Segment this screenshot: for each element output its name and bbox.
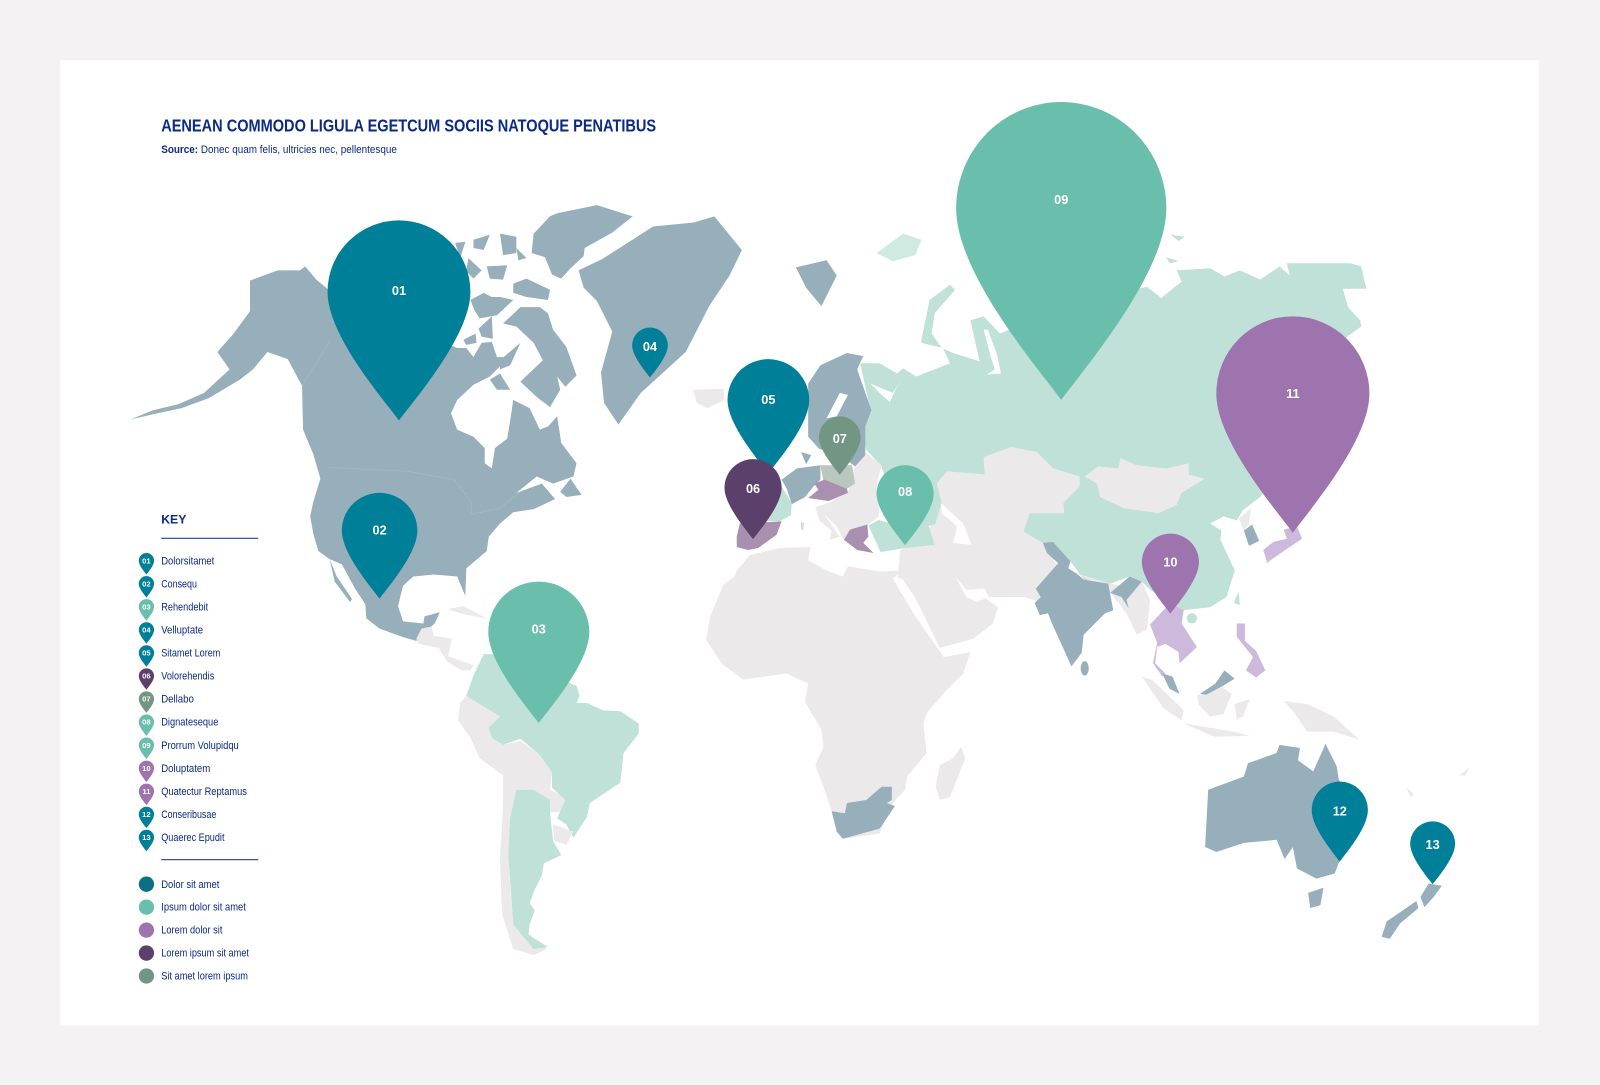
pin 06: 06 <box>746 481 760 496</box>
region: Italy <box>815 507 840 540</box>
region: Central Europe <box>808 480 848 501</box>
pin 05 <box>728 359 809 473</box>
legend item 09: 09 <box>142 741 151 750</box>
legend item 02 <box>139 576 197 598</box>
colour key: lorem ipsum sit amet <box>139 945 249 961</box>
legend item 05: 05 <box>142 649 151 658</box>
pin 02: 02 <box>372 523 387 538</box>
legend item 08: 08 <box>142 718 151 727</box>
region: Central America and South America base <box>416 606 566 955</box>
colour key: ipsum dolor sit amet: Ipsum dolor sit amet <box>161 902 246 914</box>
region: South America green countries <box>466 654 639 949</box>
legend item 10 <box>139 761 210 782</box>
region: Southeast Asia lilac <box>1150 527 1302 678</box>
legend item 01 <box>139 553 214 574</box>
pin 11: 11 <box>1286 386 1300 401</box>
region: Svalbard <box>796 260 837 306</box>
legend item 12: Conseribusae <box>161 809 216 821</box>
legend item 04 <box>139 622 203 644</box>
legend item 10: Doluptatem <box>161 763 210 775</box>
legend item 01: 01 <box>142 556 151 565</box>
legend item 04: 04 <box>142 625 151 634</box>
legend divider bottom <box>161 859 258 860</box>
region: inland seas and gulfs <box>870 330 1001 602</box>
region: Uruguay <box>553 824 573 845</box>
legend item 02: Consequ <box>161 578 197 590</box>
legend item 12: 12 <box>142 810 151 819</box>
legend item 07: Dellabo <box>161 694 194 706</box>
pin 11 <box>1216 316 1369 533</box>
legend item 03: 03 <box>142 602 151 611</box>
legend item 04: Velluptate <box>161 624 203 636</box>
legend <box>139 512 258 984</box>
pin 05: 05 <box>761 392 775 407</box>
legend item 13: Quaerec Epudit <box>161 832 225 844</box>
region: Greece <box>844 524 873 553</box>
legend item 06: 06 <box>142 672 151 681</box>
pin 01 <box>328 220 470 420</box>
legend item 05: Sitamet Lorem <box>161 648 220 660</box>
pin 06 <box>724 459 782 539</box>
pin 02 <box>342 493 417 599</box>
pin 07 <box>819 416 861 475</box>
legend item 08 <box>139 714 218 736</box>
legend item 12 <box>139 807 216 828</box>
region: Caucasus <box>930 521 953 545</box>
legend item 07: 07 <box>142 695 151 704</box>
legend divider top <box>161 538 258 539</box>
pin 10: 10 <box>1163 554 1178 569</box>
legend item 11: Quatectur Reptamus <box>161 786 247 798</box>
region: Eastern Europe and Balkans <box>815 453 882 539</box>
legend item 01: Dolorsitamet <box>161 555 214 567</box>
region: North America <box>131 205 633 641</box>
region: South Africa <box>832 787 895 839</box>
title: AENEAN COMMODO LIGULA EGETCUM SOCIIS NATOQUE PENATIBUS <box>161 116 656 136</box>
colour key: sit amet lorem ipsum: Sit amet lorem ipsum <box>161 971 248 983</box>
region: Madagascar <box>936 747 965 800</box>
colour key: lorem ipsum sit amet: Lorem ipsum sit amet <box>161 948 249 960</box>
pin 10 <box>1142 534 1199 614</box>
region: New Zealand <box>1382 884 1442 939</box>
colour key: lorem dolor sit: Lorem dolor sit <box>161 925 222 937</box>
pin 07: 07 <box>833 431 847 446</box>
legend item 03 <box>139 599 208 621</box>
pin 12: 12 <box>1333 803 1347 818</box>
legend item 09 <box>139 738 239 759</box>
legend item 10: 10 <box>142 764 151 773</box>
region: Australia <box>1205 744 1353 908</box>
legend item 02: 02 <box>142 579 151 588</box>
source line: Source: Donec quam felis, ultricies nec, pellentesque <box>161 144 397 156</box>
world map <box>131 205 1469 955</box>
legend item 06: Volorehendis <box>161 671 214 683</box>
pin 03 <box>488 582 589 723</box>
region: India <box>1035 542 1142 676</box>
region: Spain <box>737 521 782 550</box>
region: Indonesia and Papua <box>1142 508 1469 797</box>
region: Myanmar and Bangladesh <box>1077 573 1150 635</box>
legend item 11: 11 <box>142 787 151 796</box>
pin 08: 08 <box>898 484 912 499</box>
legend item 05 <box>139 645 220 667</box>
pin 01: 01 <box>392 283 406 298</box>
region: Iceland <box>693 389 724 408</box>
legend item 13: 13 <box>142 833 151 842</box>
pin 12 <box>1312 782 1368 862</box>
pin 09 <box>956 102 1166 400</box>
region: Malaysia and Korea <box>1162 524 1259 695</box>
region: Germany <box>782 465 820 504</box>
region: Scandinavia and Baltics <box>808 353 871 466</box>
region: Middle East and Central Asia <box>898 447 1080 648</box>
legend item 11 <box>139 784 247 805</box>
legend item 09: Prorrum Volupidqu <box>161 740 239 752</box>
legend item 07 <box>139 691 194 713</box>
pin 08 <box>877 465 934 545</box>
region: Denmark <box>801 452 811 464</box>
colour key: ipsum dolor sit amet <box>139 899 246 915</box>
region: Greenland <box>579 216 742 424</box>
region: Poland <box>820 465 855 489</box>
region: Africa <box>706 547 970 839</box>
pin 04: 04 <box>643 339 658 354</box>
pin 04 <box>632 328 668 378</box>
pin 09: 09 <box>1054 192 1068 207</box>
legend item 13 <box>139 830 225 851</box>
colour key: sit amet lorem ipsum <box>139 968 248 984</box>
pin 13: 13 <box>1426 837 1440 852</box>
legend item 08: Dignateseque <box>161 717 218 729</box>
legend heading: KEY <box>161 512 186 526</box>
colour key: dolor sit amet: Dolor sit amet <box>161 879 219 891</box>
legend item 03: Rehendebit <box>161 601 208 613</box>
colour key: dolor sit amet <box>139 877 219 892</box>
colour key: lorem dolor sit <box>139 922 222 938</box>
region: Mongolia <box>1085 458 1205 513</box>
pin 13 <box>1410 821 1455 884</box>
legend item 06 <box>139 668 214 690</box>
region: Russia and China <box>747 234 1366 623</box>
pin 03: 03 <box>532 622 546 637</box>
